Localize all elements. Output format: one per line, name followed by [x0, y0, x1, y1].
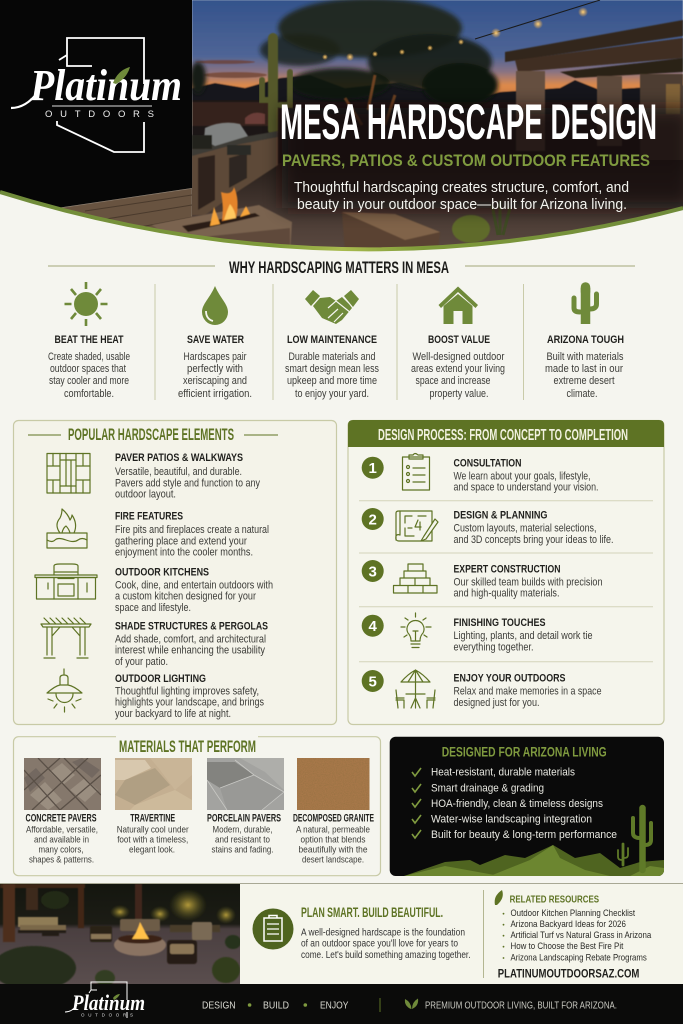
benefit: low maintenance: LOW MAINTENANCE [287, 334, 377, 346]
icon: fire pit [47, 509, 87, 548]
material: concrete pavers [24, 758, 101, 866]
item: paver patios: Pavers add style and function to any [115, 478, 260, 490]
item: outdoor lighting [47, 669, 265, 720]
icon: handshake [305, 290, 359, 324]
OUTDOORS wordmark: OUTDOORS [45, 109, 157, 120]
checklist: Water-wise landscaping integration [431, 814, 592, 826]
saguaro cactus [262, 38, 290, 130]
step 1: consultation [362, 454, 598, 494]
step 2: design & planning: 2 [369, 511, 377, 528]
material: travertine: Naturally cool under [117, 825, 189, 836]
step 5: enjoy your outdoors: Relax and make memories in a space [454, 686, 602, 698]
item: shade structures: interest while enhancing the usability [115, 644, 266, 656]
checklist: Heat-resistant, durable materials [431, 767, 575, 779]
footer logo: OUTDOORS [81, 1012, 133, 1018]
panel heading: DESIGNED FOR ARIZONA LIVING [442, 745, 607, 760]
benefit: save water [178, 286, 252, 400]
pergola [505, 20, 683, 164]
item: shade structures: SHADE STRUCTURES & PERGOLAS [115, 620, 268, 632]
material: decomposed granite: desert landscape. [302, 855, 364, 866]
heading: RELATED RESOURCES [510, 894, 599, 906]
benefit: boost value [411, 286, 505, 400]
material: concrete pavers: and available in [34, 835, 89, 846]
benefit: boost value: space and increase [416, 375, 490, 387]
icon: leaf [495, 890, 503, 905]
item: fire features: Fire pits and fireplaces create a natural [115, 524, 269, 536]
footer tagline: design build enjoy [202, 999, 348, 1011]
benefit: arizona tough: made to last in our [545, 363, 623, 375]
material: concrete pavers: many colors, [38, 845, 84, 856]
material: travertine: foot with a timeless, [117, 835, 188, 846]
leaf mark [113, 67, 130, 84]
benefit: boost value: areas extend your living [411, 363, 505, 375]
checklist: Smart drainage & grading [431, 782, 544, 794]
benefit: low maintenance: smart design mean less [285, 363, 379, 375]
item: outdoor kitchens: OUTDOOR KITCHENS [115, 566, 209, 578]
section heading: WHY HARDSCAPING MATTERS IN MESA [229, 258, 449, 277]
tree trunks [345, 75, 395, 125]
heading: PLAN SMART. BUILD BEAUTIFUL. [301, 904, 443, 920]
step 5: enjoy your outdoors: ENJOY YOUR OUTDOORS [454, 673, 566, 685]
footer tagline: design build enjoy: DESIGN [202, 999, 236, 1011]
foreground plants [0, 946, 76, 984]
body copy: of an outdoor space you'll love for years to [301, 939, 458, 950]
material: decomposed granite: beautifully with the [298, 845, 368, 856]
material: travertine: TRAVERTINE [130, 813, 175, 825]
benefit: save water: perfectly with [187, 363, 243, 375]
footer band [0, 982, 683, 1024]
benefit: low maintenance [285, 290, 379, 400]
hero photo: dusk patio [57, 0, 683, 260]
material: decomposed granite [293, 758, 374, 866]
icon: cactus [574, 287, 596, 324]
benefit: boost value: BOOST VALUE [428, 334, 490, 346]
item: shade structures: Add shade, comfort, and architectural [115, 634, 266, 646]
footer tagline: design build enjoy: ENJOY [320, 999, 348, 1011]
material: concrete pavers: CONCRETE PAVERS [26, 813, 96, 825]
item: outdoor kitchens [35, 564, 273, 614]
panel: materials that perform [14, 733, 380, 876]
Arizona outline [57, 38, 144, 152]
website: PLATINUMOUTDOORSAZ.COM [498, 967, 639, 981]
item: outdoor kitchens: a custom kitchen designed for your [115, 590, 256, 602]
footer tagline: design build enjoy: BUILD [263, 999, 289, 1011]
step 3: expert construction: Our skilled team builds with precision [454, 576, 602, 588]
hero description [294, 180, 629, 213]
check marks [412, 768, 421, 838]
body copy: come. Let's build something amazing together. [301, 950, 470, 961]
step 5: enjoy your outdoors: 5 [369, 673, 377, 690]
benefit: arizona tough: climate. [566, 388, 598, 400]
swatch: decomposed granite [297, 758, 370, 810]
checklist: Built for beauty & long-term performance [431, 829, 617, 841]
icon: water drop [202, 286, 228, 325]
item: fire features: FIRE FEATURES [115, 510, 183, 522]
paved ground [192, 160, 683, 247]
item: outdoor lighting: Thoughtful lighting improves safety, [115, 686, 259, 698]
benefit: save water: efficient irrigation. [178, 388, 252, 400]
step 4: finishing touches: everything together. [454, 641, 534, 653]
material: decomposed granite: DECOMPOSED GRANITE [293, 813, 374, 825]
step 4: finishing touches: Lighting, plants, and detail work tie [454, 630, 592, 642]
low stone wall [61, 188, 192, 229]
bottom strip rule [0, 883, 683, 884]
benefit: low maintenance: Durable materials and [288, 351, 376, 363]
footer logo: Platinum [71, 990, 145, 1015]
panel header band [348, 420, 664, 447]
string lights [322, 0, 600, 61]
step 3: expert construction: and high-quality materials. [454, 588, 560, 600]
benefit: save water: SAVE WATER [187, 334, 244, 346]
benefit: boost value: property value. [430, 388, 488, 400]
icon: house [438, 286, 478, 324]
benefit: beat the heat [48, 282, 130, 400]
benefit: low maintenance: upkeep and more time [287, 375, 377, 387]
swatch: porcelain pavers [207, 758, 284, 810]
material: porcelain pavers: Modern, durable, [212, 825, 272, 836]
body copy: A well-designed hardscape is the foundation [301, 927, 465, 938]
material: concrete pavers: shapes & patterns. [29, 855, 94, 866]
item: paver patios: outdoor layout. [115, 488, 176, 500]
item: fire features [47, 509, 269, 558]
step 4: finishing touches [362, 613, 592, 653]
panel: plan smart [240, 884, 683, 984]
panel: design process [348, 420, 664, 724]
outdoor kitchen [192, 113, 278, 215]
item: paver patios: PAVER PATIOS & WALKWAYS [115, 452, 243, 464]
text scrim [282, 108, 683, 208]
step 3: expert construction: EXPERT CONSTRUCTION [454, 563, 561, 575]
material: porcelain pavers: stains and fading. [212, 845, 274, 856]
step 1: consultation: CONSULTATION [454, 458, 522, 470]
material: concrete pavers: Affordable, versatile, [26, 825, 98, 836]
icon: sun [64, 282, 108, 326]
footer slogan: PREMIUM OUTDOOR LIVING, BUILT FOR ARIZONA. [425, 1000, 617, 1011]
step 4: finishing touches: 4 [369, 618, 378, 635]
panel heading: MATERIALS THAT PERFORM [119, 737, 256, 756]
panel heading: POPULAR HARDSCAPE ELEMENTS [68, 425, 234, 444]
step 3: expert construction: 3 [369, 563, 377, 580]
benefit: beat the heat: BEAT THE HEAT [54, 334, 124, 346]
benefit: beat the heat: outdoor spaces that [50, 363, 126, 375]
icon: pavers [47, 454, 90, 493]
desert mountains and cacti [404, 808, 664, 876]
logo panel: black [0, 0, 192, 208]
step 1: consultation: We learn about your goals, lifestyle, [454, 470, 590, 482]
benefit: beat the heat: Create shaded, usable [48, 351, 130, 363]
benefit: arizona tough: ARIZONA TOUGH [547, 334, 624, 346]
resource list: Arizona Backyard Ideas for 2026 [510, 919, 626, 930]
step 4: finishing touches: FINISHING TOUCHES [454, 617, 546, 629]
item: outdoor lighting: OUTDOOR LIGHTING [115, 673, 206, 685]
icon: clipboard badge [252, 908, 294, 950]
icon: light bulb [401, 613, 431, 648]
step 2: design & planning [362, 508, 614, 546]
checklist: HOA-friendly, clean & timeless designs [431, 798, 603, 810]
item: paver patios: Versatile, beautiful, and durable. [115, 466, 242, 478]
icon: blueprint [396, 511, 438, 541]
benefit: arizona tough: extreme desert [554, 375, 614, 387]
item: fire features: gathering place and extend your [115, 536, 247, 548]
cream page area below hero [0, 192, 683, 264]
material: decomposed granite: A natural, permeable [296, 825, 370, 836]
fire pit [152, 187, 292, 244]
panel: popular hardscape elements [14, 420, 336, 724]
panel: designed for arizona living [390, 737, 664, 876]
step 2: design & planning: and 3D concepts bring your ideas to life. [454, 534, 614, 546]
benefit: beat the heat: stay cooler and more [49, 375, 129, 387]
resource list: How to Choose the Best Fire Pit [510, 941, 624, 952]
icon: leaves [405, 998, 418, 1009]
firepit [114, 934, 166, 956]
benefit: save water: xeriscaping and [183, 375, 247, 387]
benefit: arizona tough [545, 287, 624, 400]
step 5: enjoy your outdoors: designed just for you. [454, 697, 540, 709]
stone bench [342, 212, 440, 252]
resource list: Outdoor Kitchen Planning Checklist [510, 908, 635, 919]
resource list: Artificial Turf vs Natural Grass in Arizona [510, 930, 652, 941]
item: outdoor kitchens: Cook, dine, and entertain outdoors with [115, 580, 273, 592]
resource list [510, 908, 652, 963]
swatch: concrete pavers [24, 758, 101, 810]
item: paver patios [47, 452, 260, 500]
material: decomposed granite: option that blends [300, 835, 366, 846]
benefit: boost value: Well-designed outdoor [412, 351, 505, 363]
curved hero edge [0, 192, 683, 249]
item: outdoor kitchens: space and lifestyle. [115, 602, 191, 614]
section: why hardscaping matters [48, 258, 635, 400]
material: porcelain pavers: PORCELAIN PAVERS [207, 813, 281, 825]
hero description: Thoughtful hardscaping creates structure, comfort, and [294, 180, 629, 196]
icon: bricks [394, 564, 437, 593]
icon: outdoor kitchen [35, 564, 97, 599]
benefit: beat the heat: comfortable. [64, 388, 114, 400]
hero description: beauty in your outdoor space—built for Arizona living. [297, 197, 627, 213]
checklist [431, 767, 617, 841]
item: outdoor lighting: highlights your landscape, and brings [115, 696, 265, 708]
body copy [301, 927, 470, 961]
item: fire features: enjoyment into the cooler months. [115, 546, 253, 558]
step 2: design & planning: Custom layouts, material selections, [454, 522, 596, 534]
Platinum script wordmark: Platinum [29, 61, 182, 110]
step 5: enjoy your outdoors [362, 670, 602, 709]
shrubs [452, 215, 490, 243]
item: outdoor lighting: your backyard to life at night. [115, 708, 231, 720]
seating [18, 917, 58, 927]
material: porcelain pavers [207, 758, 284, 856]
benefit: low maintenance: to enjoy your yard. [295, 388, 369, 400]
footer logo [65, 982, 145, 1018]
step 1: consultation: 1 [369, 460, 377, 477]
benefit: save water: Hardscapes pair [184, 351, 247, 363]
benefit: arizona tough: Built with materials [546, 351, 624, 363]
material: travertine [115, 758, 192, 856]
step 1: consultation: and space to understand your vision. [454, 482, 598, 494]
icon: clipboard [402, 454, 430, 490]
resource list: Arizona Landscaping Rebate Programs [510, 952, 647, 963]
item: shade structures: of your patio. [115, 656, 168, 668]
step 2: design & planning: DESIGN & PLANNING [454, 510, 548, 522]
icon: umbrella and table [396, 670, 435, 708]
icon: lamp [47, 669, 82, 712]
panel: related resources [484, 890, 652, 981]
step 3: expert construction [362, 560, 602, 600]
swatch: travertine [115, 758, 192, 810]
item: shade structures [41, 618, 268, 668]
icon: pergola [41, 618, 91, 658]
material: porcelain pavers: and resistant to [215, 835, 270, 846]
material: travertine: elegant look. [129, 845, 175, 856]
patio photo [0, 884, 241, 990]
